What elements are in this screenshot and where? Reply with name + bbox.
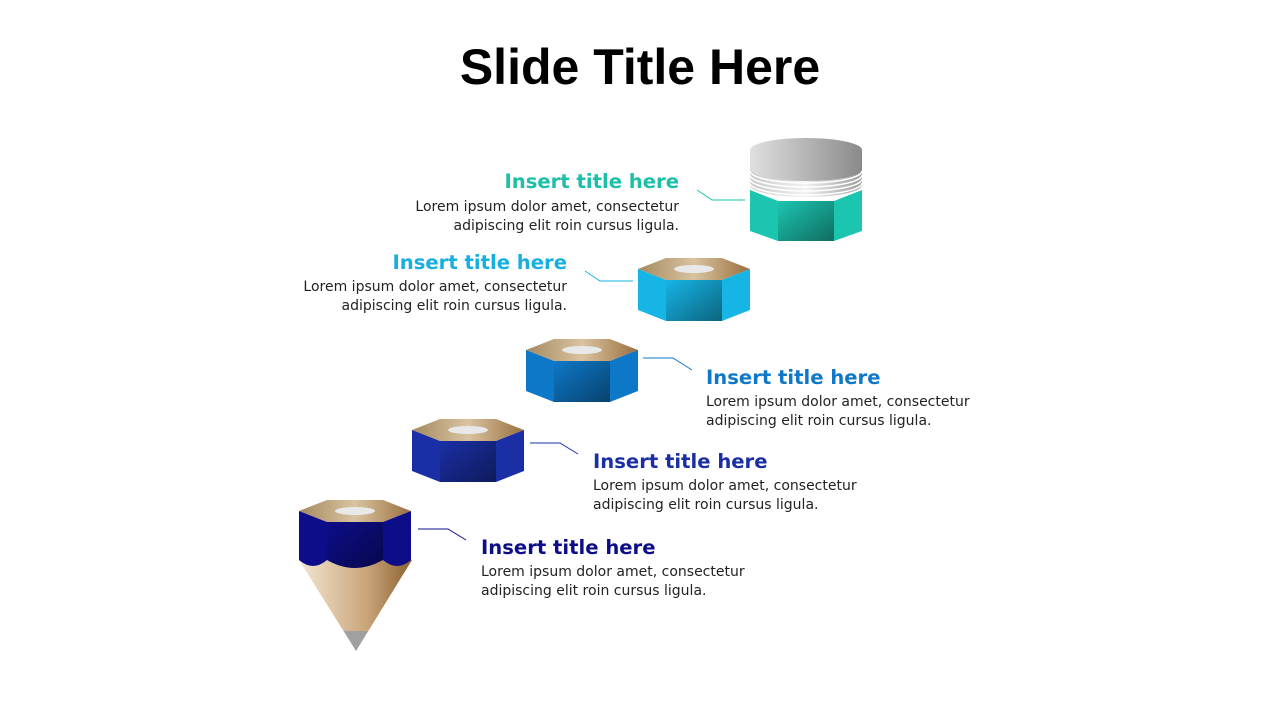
text block 5: Insert title here	[504, 170, 679, 193]
body 5	[415, 199, 679, 234]
body 1	[481, 564, 745, 599]
segment 3	[526, 339, 638, 402]
body 2: Lorem ipsum dolor amet, consectetur	[593, 478, 857, 494]
segment 4	[638, 258, 750, 321]
body 3: Lorem ipsum dolor amet, consectetur	[706, 394, 970, 410]
body 5: Lorem ipsum dolor amet, consectetur	[415, 199, 679, 215]
segment 1: pencil tip	[299, 500, 412, 651]
body 2: adipiscing elit roin cursus ligula.	[593, 497, 818, 513]
body 4	[303, 279, 567, 314]
text block 2: Insert title here	[593, 450, 768, 473]
body 3	[706, 394, 970, 429]
connectors	[418, 190, 745, 540]
body 1: Lorem ipsum dolor amet, consectetur	[481, 564, 745, 580]
body 3: adipiscing elit roin cursus ligula.	[706, 413, 931, 429]
text block 3: Insert title here	[706, 366, 881, 389]
body 4: Lorem ipsum dolor amet, consectetur	[303, 279, 567, 295]
body 5: adipiscing elit roin cursus ligula.	[454, 218, 679, 234]
body 2	[593, 478, 857, 513]
segment: eraser	[750, 138, 862, 241]
title: Slide Title Here	[460, 39, 820, 95]
body 4: adipiscing elit roin cursus ligula.	[342, 298, 567, 314]
text block 4: Insert title here	[392, 251, 567, 274]
segment 2	[412, 419, 524, 482]
text block 1: Insert title here	[481, 536, 656, 559]
body 1: adipiscing elit roin cursus ligula.	[481, 583, 706, 599]
